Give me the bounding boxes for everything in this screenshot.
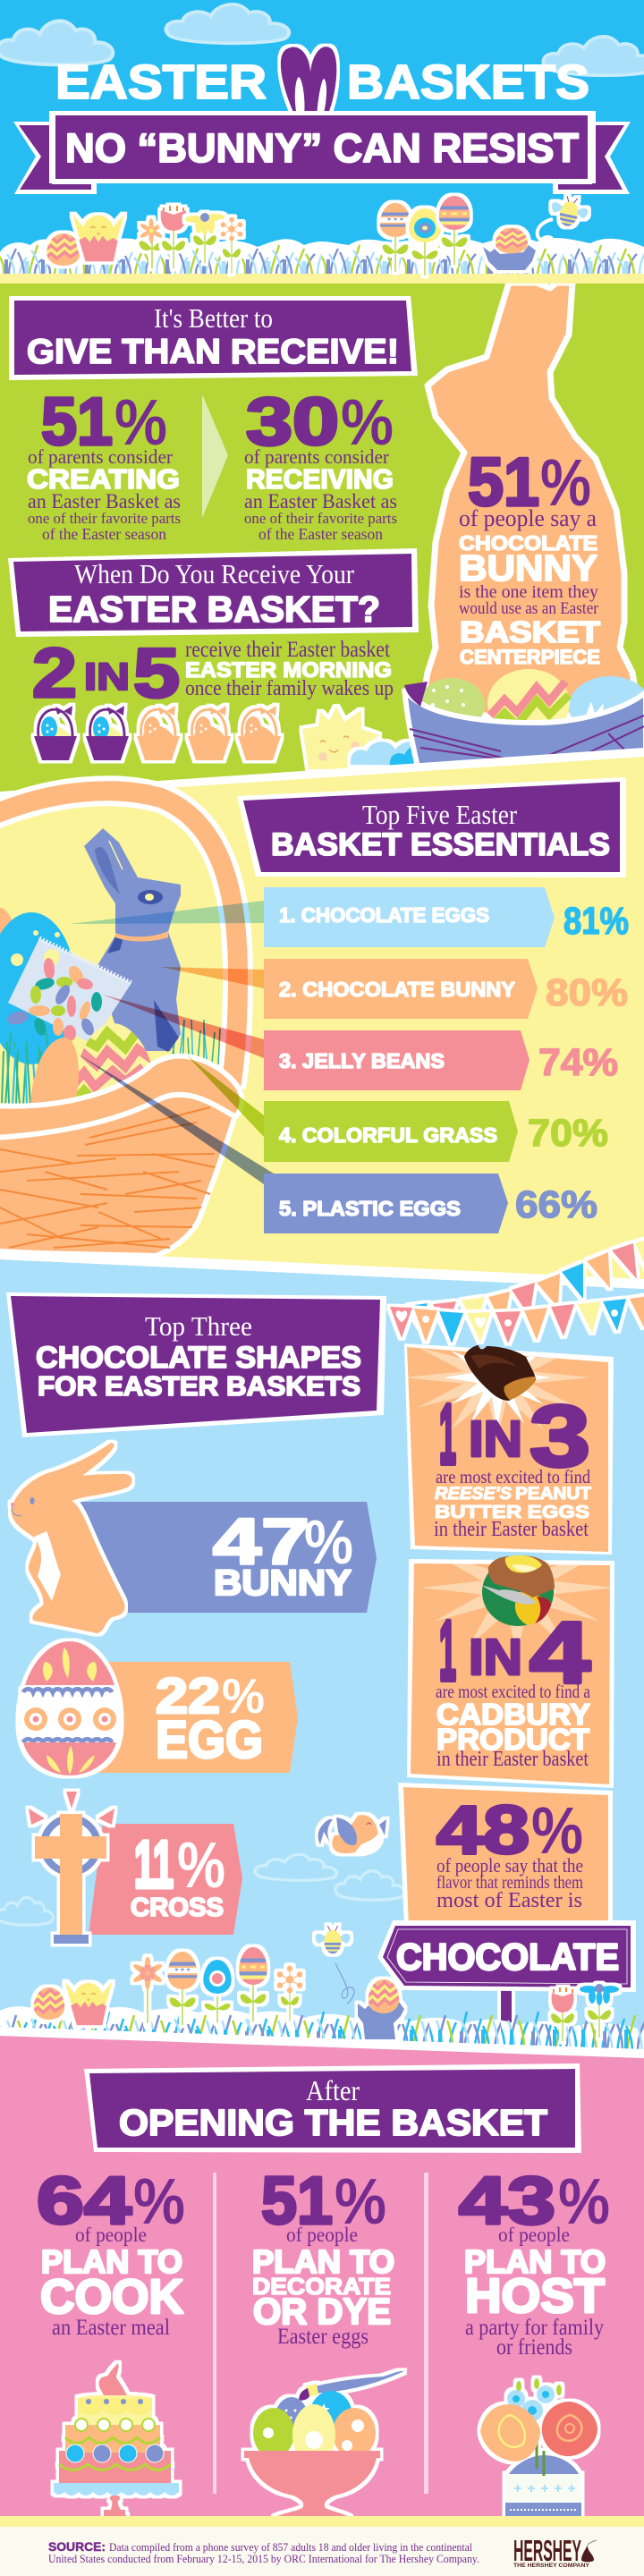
panel: 1 in 3: are most excited to find bbox=[436, 1466, 590, 1487]
stat: 30% receiving: 30 bbox=[246, 384, 339, 459]
section: sky header bbox=[0, 0, 644, 284]
bunny statistic text: % bbox=[540, 445, 591, 520]
bar: colorful grass 70% bbox=[264, 1101, 608, 1162]
stat: 30% receiving: RECEIVING bbox=[246, 463, 394, 495]
stat: 2 in 5 bbox=[32, 633, 394, 712]
panel: 1 in 3 bbox=[404, 1343, 614, 1555]
headline: BASKET ESSENTIALS bbox=[271, 827, 610, 862]
starburst bbox=[421, 1563, 610, 1646]
column dividers bbox=[213, 2173, 428, 2494]
ribbon text: NO “BUNNY” CAN RESIST bbox=[65, 125, 579, 171]
panel: 1 in 4: IN bbox=[469, 1629, 522, 1686]
bar: egg 22% bbox=[89, 1662, 298, 1773]
stat: 30% receiving: of parents consider bbox=[244, 445, 390, 468]
section: basket essentials bbox=[0, 748, 644, 1281]
stat: 43% host bbox=[459, 2163, 610, 2360]
clouds: lower sky bbox=[0, 1854, 404, 1925]
logo: hershey: THE HERSHEY COMPANY bbox=[513, 2563, 590, 2569]
stat: 2 in 5: IN bbox=[84, 656, 130, 699]
headline: GIVE THAN RECEIVE! bbox=[27, 333, 399, 371]
stat: 64% cook: an Easter meal bbox=[52, 2316, 170, 2340]
stat: 43% host: of people bbox=[498, 2224, 570, 2246]
stat: 30% receiving bbox=[244, 384, 397, 543]
blue egg bbox=[0, 912, 76, 1064]
panel: 1 in 3: PEANUT bbox=[515, 1485, 591, 1504]
grass strip with white backing bbox=[0, 2005, 644, 2049]
stat: 43% host: 43 bbox=[459, 2163, 555, 2238]
stat: 30% receiving: of the Easter season bbox=[258, 525, 383, 543]
stat: 64% cook: COOK bbox=[40, 2270, 183, 2324]
banner: basket essentials bbox=[237, 777, 626, 877]
stat: 51% decorate: 51 bbox=[261, 2163, 333, 2238]
connector: chocolate bunny bbox=[161, 967, 264, 988]
section: give than receive bbox=[0, 283, 644, 792]
bar: chocolate eggs 81%: 81% bbox=[564, 900, 629, 943]
orange egg front bbox=[30, 1038, 79, 1109]
bar: colorful grass 70%: 4. COLORFUL GRASS bbox=[279, 1123, 497, 1147]
connector: colorful grass bbox=[187, 1055, 264, 1137]
stat: 48 bbox=[436, 1792, 530, 1868]
icon: rabbit bbox=[11, 1443, 132, 1633]
source text: United States conducted from February 12-15, 2015 by ORC International for The Hershey Company. bbox=[48, 2552, 479, 2565]
orange egg bbox=[0, 908, 12, 934]
stat: 51% decorate bbox=[252, 2163, 394, 2349]
stat: 30% receiving: % bbox=[341, 387, 394, 459]
cloud: right bbox=[543, 37, 644, 75]
bar: cross 11% bbox=[89, 1824, 242, 1935]
basket weave bbox=[0, 1107, 215, 1248]
stat: 51% decorate: PLAN TO bbox=[252, 2243, 394, 2280]
icons: stickers in the lower grass bbox=[30, 1926, 619, 2041]
panel: 48% flavor: % bbox=[531, 1793, 583, 1868]
basket body bbox=[0, 1056, 242, 1256]
footer stripe bbox=[0, 2516, 644, 2527]
title ribbon bbox=[13, 111, 631, 194]
icons: easter stickers in the grass bbox=[43, 193, 590, 275]
banner: chocolate shapes bbox=[6, 1292, 386, 1437]
stat: 51% creating: one of their favorite parts bbox=[28, 510, 181, 527]
panel: 1 in 4: in their Easter basket bbox=[436, 1748, 589, 1771]
stat: 43% host: PLAN TO bbox=[464, 2243, 606, 2280]
headline: EASTER BASKET? bbox=[48, 589, 380, 630]
section: after opening the basket bbox=[0, 2027, 644, 2518]
connector: plastic eggs bbox=[78, 1054, 274, 1184]
stat: 51% creating: an Easter Basket as bbox=[28, 490, 181, 513]
stat: 2 in 5: 2 bbox=[32, 633, 77, 712]
stat: 2 in 5: receive their Easter basket bbox=[185, 638, 390, 662]
source text bbox=[48, 2539, 479, 2565]
stat: 64% cook: PLAN TO bbox=[41, 2243, 182, 2280]
icon: bunny ears bbox=[281, 47, 336, 116]
icon: cross bbox=[29, 1792, 114, 1944]
bar: cross 11%: 11 bbox=[134, 1827, 174, 1902]
icon: nest bowl with eggs bbox=[404, 669, 644, 778]
bar: bunny 47%: BUNNY bbox=[214, 1563, 352, 1603]
grass strip with white backing bbox=[0, 237, 644, 284]
connector: chocolate eggs bbox=[70, 901, 264, 924]
title word: BASKETS: BASKETS bbox=[347, 55, 589, 109]
panel: 1 in 3: 3 bbox=[530, 1387, 590, 1485]
bunny statistic text: would use as an Easter bbox=[459, 599, 599, 618]
section: chocolate shapes bbox=[0, 1239, 644, 2062]
bar: chocolate eggs 81%: 1. CHOCOLATE EGGS bbox=[279, 903, 489, 927]
bar: jelly beans 74% bbox=[264, 1030, 618, 1090]
bunting: lower row bbox=[390, 1295, 644, 1343]
stat: 51% decorate: DECORATE bbox=[252, 2273, 391, 2300]
stat: 30% receiving: one of their favorite parts bbox=[244, 510, 397, 527]
subhead: Top Three bbox=[145, 1310, 252, 1342]
icons: five baskets bbox=[34, 706, 281, 760]
stat: 51% creating bbox=[27, 384, 181, 543]
bar: bunny 47% bbox=[76, 1502, 377, 1613]
chocolate bunny bbox=[84, 828, 181, 1052]
icon: sun bbox=[302, 707, 379, 773]
subhead: When Do You Receive Your bbox=[74, 558, 355, 589]
stat: 51% creating: 51 bbox=[41, 384, 113, 459]
grass right bbox=[172, 1020, 221, 1064]
bar: egg 22%: 22 bbox=[156, 1667, 220, 1724]
icon: clouds by the sun bbox=[351, 741, 445, 766]
bar: chocolate bunny 80%: 80% bbox=[546, 971, 628, 1014]
panel: 1 in 3: REESE'S bbox=[435, 1485, 512, 1504]
panel: 48% flavor: of people say that the bbox=[436, 1854, 583, 1877]
panel: 1 in 4 bbox=[407, 1555, 614, 1788]
panel: 48% flavor: flavor that reminds them bbox=[436, 1873, 583, 1893]
source text: Data compiled from a phone survey of 857 adults 18 and older living in the continental bbox=[109, 2540, 472, 2554]
icon: bowl of painted eggs bbox=[244, 2371, 404, 2518]
icon: peanut butter egg bbox=[464, 1345, 536, 1401]
title word: EASTER: EASTER bbox=[55, 55, 267, 109]
bar: chocolate bunny 80%: 2. CHOCOLATE BUNNY bbox=[279, 978, 515, 1001]
stat: 30% receiving: an Easter Basket as bbox=[244, 490, 397, 513]
panel: 1 in 3: BUTTER EGGS bbox=[435, 1503, 589, 1522]
banner: opening the basket bbox=[84, 2063, 581, 2153]
icon: vase of flowers bbox=[480, 2378, 597, 2518]
basket contents bbox=[0, 828, 220, 1109]
cloud: top centre bbox=[166, 4, 289, 43]
bunny statistic text: CHOCOLATE bbox=[459, 531, 597, 555]
bunny statistic text: 51 bbox=[468, 445, 539, 521]
panel: 1 in 4: CADBURY bbox=[436, 1698, 590, 1731]
illustration: basket with bunny and eggs bbox=[0, 791, 242, 1256]
panel: 1 in 3: IN bbox=[469, 1411, 522, 1468]
panel: 48% flavor bbox=[398, 1783, 613, 1928]
zigzag egg bbox=[88, 1023, 147, 1051]
bar: chocolate bunny 80% bbox=[264, 959, 628, 1019]
grass left bbox=[2, 1033, 50, 1105]
subhead: It's Better to bbox=[154, 302, 273, 334]
stat: 43% host: or friends bbox=[496, 2335, 572, 2360]
chocolate bunny bbox=[420, 283, 640, 716]
starburst bbox=[408, 1348, 589, 1429]
stat: 51% creating: CREATING bbox=[27, 463, 180, 495]
panel: 1 in 3: in their Easter basket bbox=[434, 1518, 589, 1541]
stat: 2 in 5: once their family wakes up bbox=[185, 677, 394, 700]
sign: chocolate bbox=[377, 1920, 636, 2026]
stat: 43% host: a party for family bbox=[465, 2316, 604, 2340]
bar: jelly beans 74%: 74% bbox=[538, 1041, 618, 1084]
bar: plastic eggs 66%: 5. PLASTIC EGGS bbox=[279, 1197, 461, 1220]
subhead: Top Five Easter bbox=[362, 799, 518, 830]
panel: 1 in 4: 4 bbox=[530, 1604, 590, 1701]
stat: 51% decorate: Easter eggs bbox=[277, 2325, 369, 2349]
bunny statistic text: is the one item they bbox=[459, 582, 598, 602]
stat: 64% cook: 64 bbox=[37, 2163, 131, 2238]
bunny statistic text bbox=[459, 445, 600, 668]
subhead: After bbox=[306, 2074, 360, 2106]
basket handle bbox=[0, 791, 238, 1087]
bar: bunny 47%: % bbox=[304, 1507, 353, 1577]
panel: 48% flavor: most of Easter is bbox=[436, 1889, 582, 1912]
headline: OPENING THE BASKET bbox=[119, 2102, 547, 2143]
bar: cross 11%: CROSS bbox=[131, 1894, 224, 1922]
bunny statistic text: of people say a bbox=[459, 505, 597, 531]
panel: 1 in 3: 1 bbox=[439, 1387, 456, 1482]
stat: 51% decorate: % bbox=[335, 2166, 386, 2238]
panel: 1 in 4: PRODUCT bbox=[436, 1723, 589, 1756]
stat: 51% decorate: of people bbox=[286, 2224, 358, 2246]
arrow bbox=[202, 394, 228, 518]
bunny statistic text: BASKET bbox=[460, 615, 600, 648]
icon: cadbury egg bbox=[481, 1555, 555, 1626]
icon: bird bbox=[318, 1815, 386, 1853]
jelly bean bag bbox=[6, 938, 131, 1044]
bunny statistic text: CENTERPIECE bbox=[460, 646, 600, 668]
stat: 51% creating: % bbox=[114, 387, 167, 459]
source text: SOURCE: bbox=[48, 2539, 106, 2554]
stat: 2 in 5: 5 bbox=[133, 633, 180, 712]
sign: chocolate: CHOCOLATE bbox=[396, 1936, 619, 1978]
stat: 64% cook bbox=[37, 2163, 185, 2340]
bar: bunny 47%: 47 bbox=[213, 1506, 309, 1578]
connector: jelly beans bbox=[103, 995, 264, 1058]
bar: colorful grass 70%: 70% bbox=[528, 1112, 608, 1155]
stat: 51% creating: of parents consider bbox=[28, 445, 174, 468]
bar: plastic eggs 66% bbox=[264, 1174, 597, 1233]
bar: egg 22%: EGG bbox=[156, 1711, 263, 1769]
stat: 43% host: % bbox=[558, 2166, 610, 2238]
banner: when do you receive bbox=[8, 548, 419, 637]
banner: give than receive bbox=[9, 296, 418, 380]
stat: 51% decorate: OR DYE bbox=[253, 2291, 391, 2332]
bar: chocolate eggs 81% bbox=[264, 887, 629, 947]
cloud: left bbox=[0, 21, 113, 64]
footer bbox=[0, 2527, 644, 2576]
banner: chocolate shapes: FOR EASTER BASKETS bbox=[38, 1370, 360, 1402]
stat: 2 in 5: EASTER MORNING bbox=[185, 658, 392, 682]
headline: CHOCOLATE SHAPES bbox=[36, 1341, 361, 1375]
bar: egg 22%: % bbox=[222, 1668, 265, 1724]
icon: decorated egg bbox=[19, 1641, 121, 1775]
bar: cross 11%: % bbox=[177, 1830, 225, 1902]
bar: jelly beans 74%: 3. JELLY BEANS bbox=[279, 1049, 445, 1072]
panel: 1 in 4: are most excited to find a bbox=[436, 1681, 591, 1702]
stat: 43% host: HOST bbox=[465, 2269, 605, 2323]
icon: cake bbox=[54, 2363, 179, 2516]
panel: 1 in 4: 1 bbox=[439, 1604, 456, 1699]
stat: 64% cook: of people bbox=[75, 2224, 147, 2246]
bunny statistic text: BUNNY bbox=[459, 547, 597, 589]
bunting: upper row bbox=[408, 1239, 644, 1331]
stat: 64% cook: % bbox=[133, 2166, 185, 2238]
stat: 51% creating: of the Easter season bbox=[42, 525, 166, 543]
bar: plastic eggs 66%: 66% bbox=[515, 1183, 597, 1226]
logo: hershey bbox=[513, 2534, 597, 2569]
